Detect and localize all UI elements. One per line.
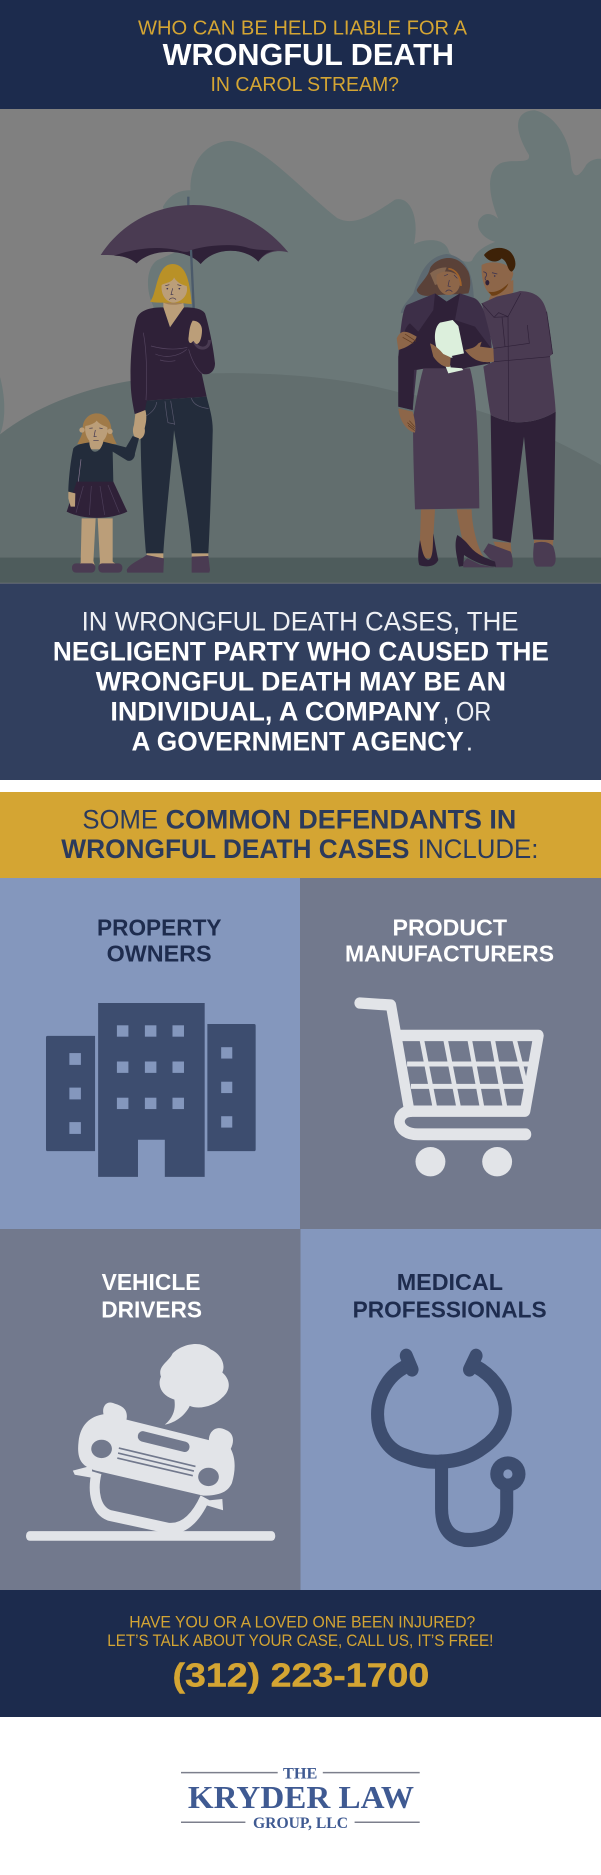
statement text: INDIVIDUAL, A COMPANY xyxy=(110,697,441,727)
label: PROPERTY xyxy=(97,915,222,941)
label: MEDICAL xyxy=(397,1269,503,1295)
section heading: WRONGFUL DEATH CASES xyxy=(61,834,409,864)
section heading: INCLUDE: xyxy=(418,834,538,864)
panel: defendants heading xyxy=(0,792,601,878)
panel: property owners xyxy=(0,878,300,1229)
panel: illustration of grieving family xyxy=(0,109,601,584)
logo: The Kryder Law Group, LLC: KRYDER LAW xyxy=(188,1779,414,1815)
statement text: . xyxy=(466,726,473,756)
statement text: A GOVERNMENT AGENCY xyxy=(132,726,464,756)
statement text xyxy=(53,606,549,756)
girl xyxy=(67,413,139,573)
label: PROFESSIONALS xyxy=(353,1296,547,1322)
label: DRIVERS xyxy=(101,1296,202,1322)
hands xyxy=(397,332,494,368)
call to action text: LET’S TALK ABOUT YOUR CASE, CALL US, IT’S FREE! xyxy=(107,1632,493,1650)
statement text: WRONGFUL DEATH MAY BE AN xyxy=(96,666,506,696)
panel: vehicle drivers xyxy=(0,1229,300,1590)
title: WRONGFUL DEATH xyxy=(163,38,454,72)
icon: stethoscope xyxy=(378,1356,526,1540)
figure: grieving couple with urn xyxy=(397,248,556,567)
figure: woman with umbrella and girl xyxy=(67,197,288,573)
title xyxy=(138,17,468,96)
label xyxy=(353,1269,547,1322)
logo: The Kryder Law Group, LLC: THE xyxy=(283,1766,317,1782)
statement text: , OR xyxy=(443,697,491,727)
label: PRODUCT xyxy=(392,915,508,941)
statement text: IN WRONGFUL DEATH CASES, THE xyxy=(82,606,519,636)
panel: product manufacturers xyxy=(300,878,601,1229)
woman xyxy=(127,264,215,573)
section heading xyxy=(61,804,539,864)
grieving woman xyxy=(398,254,492,566)
icon: office buildings xyxy=(46,1003,256,1177)
background trees and hills xyxy=(0,110,601,583)
label: OWNERS xyxy=(107,940,212,966)
label xyxy=(101,1269,202,1322)
logo: The Kryder Law Group, LLC: GROUP, LLC xyxy=(253,1815,348,1832)
call to action text: HAVE YOU OR A LOVED ONE BEEN INJURED? xyxy=(129,1613,475,1631)
panel: intro statement xyxy=(0,584,601,780)
label xyxy=(345,915,554,966)
statement text: NEGLIGENT PARTY WHO CAUSED THE xyxy=(53,636,549,666)
panel: medical professionals xyxy=(300,1229,601,1590)
section heading: COMMON DEFENDANTS IN xyxy=(166,804,516,834)
label xyxy=(97,915,222,966)
label: MANUFACTURERS xyxy=(345,940,554,966)
section heading: SOME xyxy=(82,804,158,834)
panel: header xyxy=(0,0,601,109)
man xyxy=(456,248,556,567)
label: VEHICLE xyxy=(102,1269,200,1295)
icon: overturned car with smoke xyxy=(26,1344,275,1541)
urn xyxy=(435,320,464,373)
panel: call to action xyxy=(0,1590,601,1717)
logo: The Kryder Law Group, LLC xyxy=(181,1766,420,1832)
title: WHO CAN BE HELD LIABLE FOR A xyxy=(138,17,468,39)
icon: umbrella xyxy=(101,197,288,322)
icon: shopping cart xyxy=(360,1003,539,1176)
call to action text xyxy=(107,1613,493,1650)
title: IN CAROL STREAM? xyxy=(210,74,399,96)
phone number: (312) 223-1700 xyxy=(172,1657,429,1694)
